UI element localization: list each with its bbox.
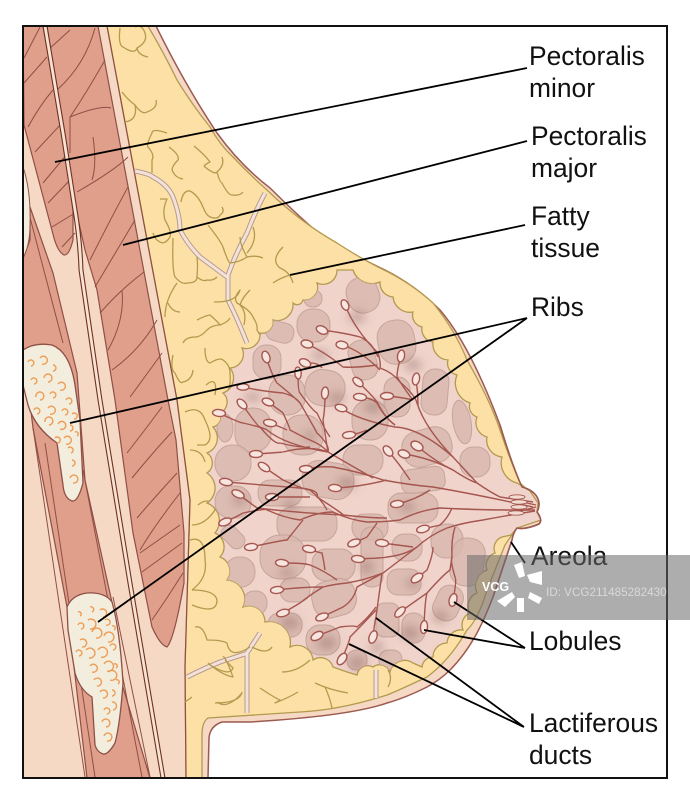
label: Fatty tissue: Fatty [531, 201, 590, 231]
label: Ribs: Ribs [531, 292, 584, 322]
rib 1 [23, 344, 83, 501]
fat left boundary [107, 26, 190, 778]
lactiferous ducts [219, 305, 536, 659]
body base: skin and fascia [23, 26, 541, 778]
lobes inside gland [215, 273, 490, 670]
muscle fibres [24, 27, 183, 620]
label: Lobules: Lobules [529, 626, 621, 656]
label: Pectoralis minor: Pectoralis [529, 41, 645, 71]
label: Pectoralis minor: minor [529, 73, 595, 103]
label: Areola: Areola [531, 541, 608, 571]
areola and nipple outline [493, 425, 541, 597]
label: Lactiferous ducts: Lactiferous [529, 708, 658, 738]
label: Pectoralis major: Pectoralis [531, 121, 647, 151]
leader lines [55, 68, 527, 727]
watermark: ID: VCG211485282430 [546, 586, 667, 599]
rib-cage membrane ribbon [45, 26, 163, 778]
veins through fat [135, 171, 376, 713]
muscle: pectoralis minor [23, 26, 73, 255]
glandular tissue [207, 270, 541, 675]
lung edge [23, 167, 30, 258]
muscle: upper intercostal [23, 207, 150, 778]
label: Fatty tissue: tissue [531, 233, 600, 263]
watermark [467, 555, 690, 620]
lobe shadows [232, 311, 448, 670]
fat lobule squiggles [119, 26, 390, 708]
fatty tissue [107, 26, 530, 778]
rib 2 [67, 593, 123, 754]
muscle: pectoralis major [47, 26, 184, 647]
label: Lactiferous ducts: ducts [529, 740, 592, 770]
lobule terminals [212, 299, 458, 667]
label: Pectoralis major: major [531, 153, 597, 183]
nipple duct openings [508, 495, 527, 515]
watermark: VCG [482, 580, 509, 594]
tissue between ribs [28, 210, 150, 777]
